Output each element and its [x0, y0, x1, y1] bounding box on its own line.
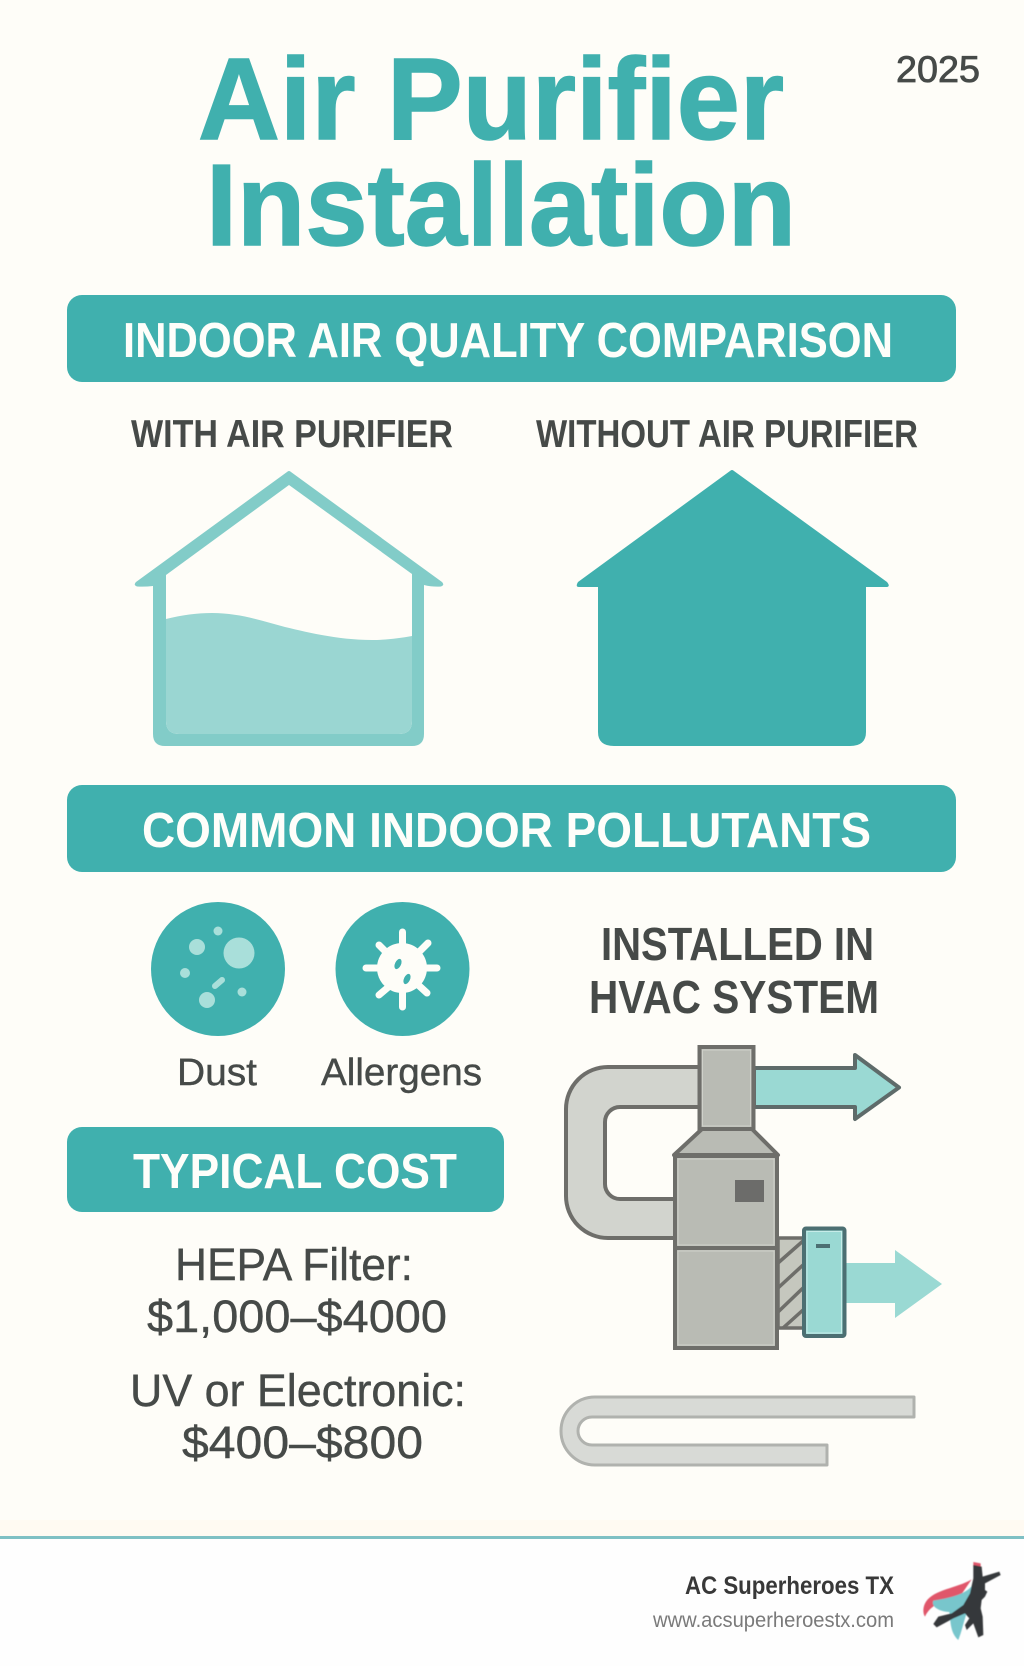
icon: dust: [151, 902, 285, 1036]
year label: 2025: [896, 49, 980, 90]
website: www.acsuperheroestx.com: [652, 1609, 894, 1632]
icon: allergens: [336, 902, 470, 1036]
heading: installed in hvac system: INSTALLED IN: [601, 918, 874, 970]
footer: [0, 1520, 1024, 1666]
diagram: hvac system with air purifier: [566, 1047, 942, 1348]
icon: house full of pollution: [577, 470, 889, 746]
title: [198, 34, 796, 270]
text block: uv or electronic cost: $400–$800: [182, 1417, 423, 1468]
arrow: supply air out: [754, 1055, 899, 1119]
panel: with air purifier: [131, 413, 453, 746]
plenum box: [700, 1047, 754, 1129]
section banner: indoor air quality comparison: INDOOR AIR QUALITY COMPARISON: [123, 314, 893, 368]
section banner: indoor air quality comparison: [67, 295, 956, 382]
furnace transition: [674, 1129, 778, 1155]
furnace cabinet: [675, 1156, 777, 1348]
text block: uv or electronic cost: UV or Electronic:: [130, 1365, 466, 1416]
heading: without air purifier: WITHOUT AIR PURIFIER: [536, 413, 918, 456]
air purifier unit: [804, 1228, 844, 1336]
title: Air Purifier: [198, 34, 784, 164]
label: allergens: Allergens: [321, 1052, 482, 1094]
icon: flexible duct: [561, 1397, 914, 1465]
filter section with hatching: [778, 1238, 804, 1328]
section banner: common indoor pollutants: COMMON INDOOR POLLUTANTS: [142, 804, 871, 858]
text block: hepa filter cost: [147, 1239, 447, 1342]
text block: uv or electronic cost: [130, 1365, 466, 1468]
heading: with air purifier: WITH AIR PURIFIER: [131, 413, 453, 456]
title: Installation: [206, 140, 796, 270]
arrow: clean air out: [846, 1250, 942, 1318]
icon: superhero logo: [923, 1562, 1001, 1640]
section banner: typical cost: [67, 1127, 504, 1212]
section banner: common indoor pollutants: [67, 785, 956, 872]
heading: installed in hvac system: HVAC SYSTEM: [589, 971, 879, 1023]
text block: hepa filter cost: HEPA Filter:: [175, 1239, 413, 1290]
company name: AC Superheroes TX: [685, 1572, 894, 1600]
label: dust: Dust: [177, 1052, 257, 1094]
heading: installed in hvac system: [589, 918, 879, 1023]
return duct: [566, 1067, 700, 1238]
text block: hepa filter cost: $1,000–$4000: [147, 1291, 447, 1342]
icon: house with low air pollution: [135, 471, 443, 746]
panel: without air purifier: [536, 413, 918, 746]
section banner: typical cost: TYPICAL COST: [133, 1145, 457, 1199]
